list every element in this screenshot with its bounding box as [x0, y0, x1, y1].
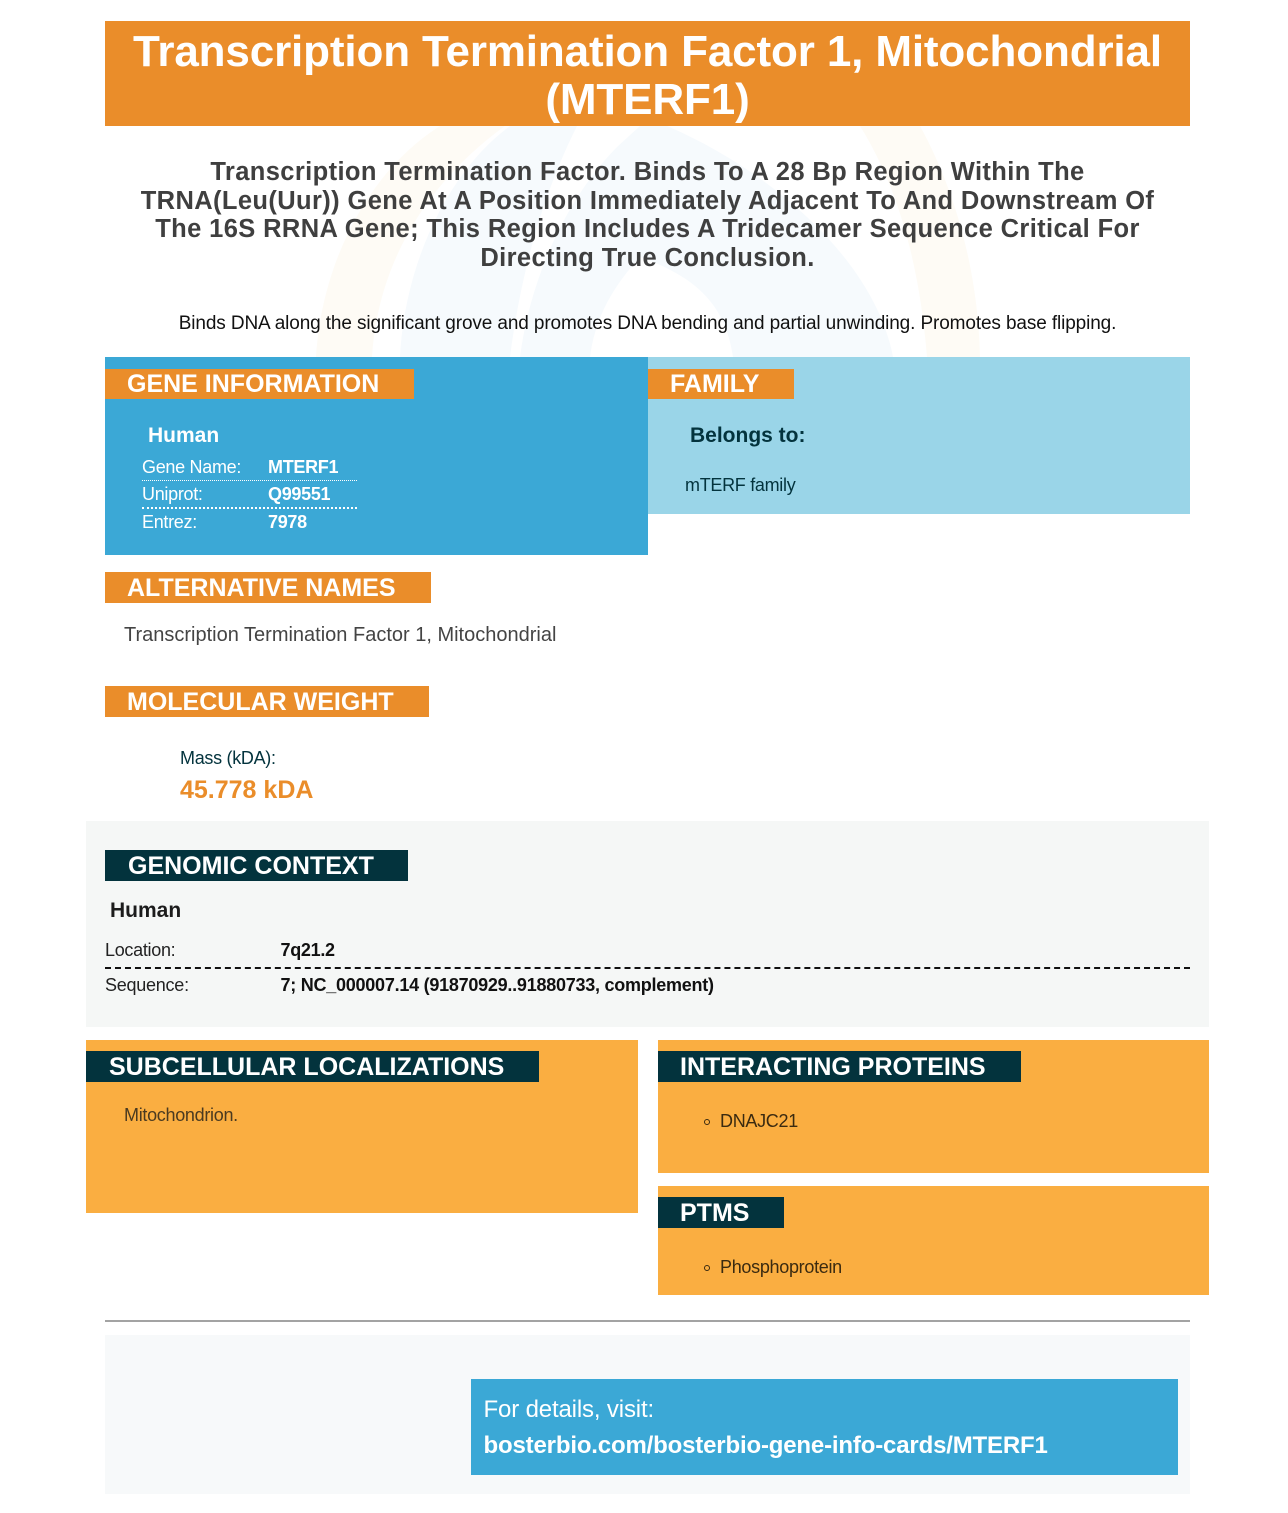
heading: PTMs: PTMS [680, 1199, 749, 1227]
location row [105, 939, 1190, 969]
title banner: (MTERF1) [545, 75, 750, 124]
heading: molecular weight: MOLECULAR WEIGHT [127, 688, 394, 716]
gene info table: Uniprot: [142, 484, 203, 504]
heading: alternative names: ALTERNATIVE NAMES [127, 574, 396, 602]
gene info table [142, 457, 357, 532]
panel: interacting proteins [658, 1040, 1209, 1173]
title banner [105, 21, 1190, 126]
panel: alternative names [105, 572, 556, 646]
species label: Human [148, 424, 219, 447]
gene info table: Q99551 [268, 484, 330, 504]
family value: mTERF family [685, 475, 795, 495]
panel: family [648, 357, 1190, 514]
title banner: Transcription Termination Factor 1, Mitochondrial [133, 27, 1162, 76]
heading: family [648, 369, 794, 399]
heading: PTMs [658, 1197, 784, 1228]
subtitle description: TRNA(Leu(Uur)) Gene At A Position Immediately Adjacent To And Downstream Of [141, 187, 1154, 215]
callout: details link: bosterbio.com/bosterbio-gene-info-cards/MTERF1 [484, 1432, 1048, 1459]
heading: gene information: GENE INFORMATION [127, 370, 379, 398]
panel: PTMs [658, 1186, 1209, 1295]
species label: Human [110, 899, 181, 922]
panel: footer [105, 1335, 1190, 1494]
callout: details link: For details, visit: [484, 1396, 654, 1423]
gene info table: Entrez: [142, 512, 197, 532]
alternative name text: Transcription Termination Factor 1, Mitochondrial [124, 624, 556, 646]
list item: phosphoprotein: Phosphoprotein [720, 1257, 842, 1277]
mass label: Mass (kDA): [180, 748, 276, 768]
mass value: 45.778 kDA [180, 776, 313, 804]
heading: subcellular localizations: SUBCELLULAR LOCALIZATIONS [109, 1053, 504, 1081]
localization text: Mitochondrion. [124, 1105, 238, 1125]
heading: genomic context: GENOMIC CONTEXT [128, 852, 374, 880]
gene info table: Gene Name: [142, 457, 241, 477]
subtitle description: The 16S RRNA Gene; This Region Includes A Tridecamer Sequence Critical For [155, 215, 1140, 243]
heading: interacting proteins: INTERACTING PROTEINS [680, 1053, 986, 1081]
location row: 7q21.2 [280, 940, 335, 960]
function summary: Binds DNA along the significant grove and promotes DNA bending and partial unwinding. Promotes base flipping. [179, 313, 1116, 334]
panel: molecular weight [105, 686, 429, 804]
panel: subcellular localizations [86, 1040, 638, 1213]
subtitle description [141, 158, 1154, 272]
sequence row: Sequence: [105, 975, 189, 995]
callout: details link [471, 1379, 1178, 1475]
gene info table: 7978 [268, 512, 307, 532]
subtitle description: Directing True Conclusion. [480, 244, 815, 272]
list item: DNAJC21: DNAJC21 [720, 1111, 798, 1131]
sequence row: 7; NC_000007.14 (91870929..91880733, complement) [280, 975, 714, 995]
heading: family: FAMILY [670, 370, 759, 398]
location row: Location: [105, 940, 175, 960]
panel: gene information [105, 357, 648, 555]
belongs to label: Belongs to: [690, 424, 806, 447]
panel: genomic context [86, 821, 1209, 1027]
background watermark logo [316, 126, 980, 357]
subtitle description: Transcription Termination Factor. Binds To A 28 Bp Region Within The [210, 158, 1085, 186]
gene info table: MTERF1 [268, 457, 338, 477]
